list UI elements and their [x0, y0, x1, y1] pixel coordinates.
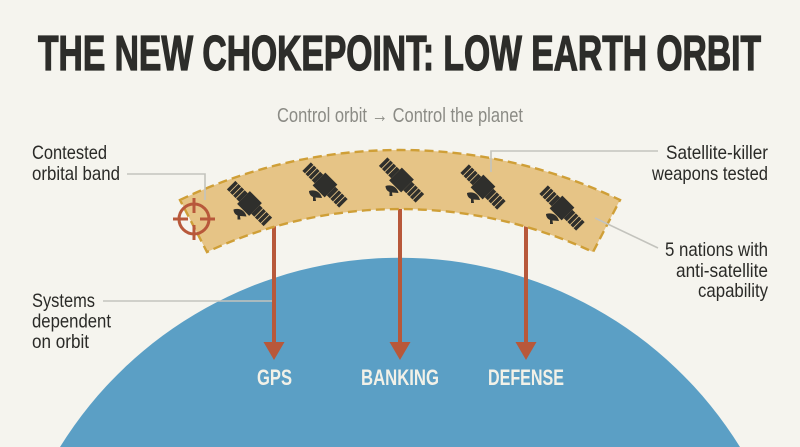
subtitle: Control orbit → Control the planet	[277, 105, 523, 127]
label: satellite-killer weapons tested: Satellite-killer	[666, 142, 768, 164]
label: five nations with anti-satellite capability	[665, 239, 768, 302]
label: systems dependent on orbit: on orbit	[32, 331, 90, 353]
earth	[60, 258, 740, 447]
label: systems dependent on orbit	[32, 290, 111, 353]
label: GPS: GPS	[257, 365, 292, 390]
leader: systems dependent	[103, 300, 272, 302]
label: systems dependent on orbit: Systems	[32, 290, 95, 312]
label: five nations with anti-satellite capability: 5 nations with	[665, 239, 768, 261]
label: five nations with anti-satellite capability: capability	[698, 280, 768, 302]
leader: five nations	[595, 218, 658, 248]
leader: contested band	[127, 174, 205, 200]
arrow: defense	[516, 225, 536, 360]
label: satellite-killer weapons tested	[651, 142, 768, 185]
arrow: GPS	[264, 225, 284, 360]
satellite 4	[458, 162, 508, 212]
leader: satellite-killer weapons	[491, 151, 658, 172]
label: banking: BANKING	[361, 365, 439, 390]
arrow: banking	[390, 205, 410, 360]
label: contested orbital band: orbital band	[32, 163, 120, 185]
label: defense: DEFENSE	[488, 365, 564, 390]
satellite 2	[300, 160, 350, 210]
arrows: orbit to dependent systems	[264, 205, 536, 360]
label: systems dependent on orbit: dependent	[32, 310, 111, 332]
contested orbital band	[180, 150, 620, 252]
label: contested orbital band	[32, 142, 120, 185]
satellite 1	[225, 179, 274, 228]
satellite 3	[377, 155, 426, 205]
satellite 5	[537, 183, 587, 233]
label: five nations with anti-satellite capability: anti-satellite	[676, 260, 768, 282]
icon: crosshair target	[173, 198, 215, 240]
label: satellite-killer weapons tested: weapons tested	[651, 163, 768, 185]
label: contested orbital band: Contested	[32, 142, 107, 164]
